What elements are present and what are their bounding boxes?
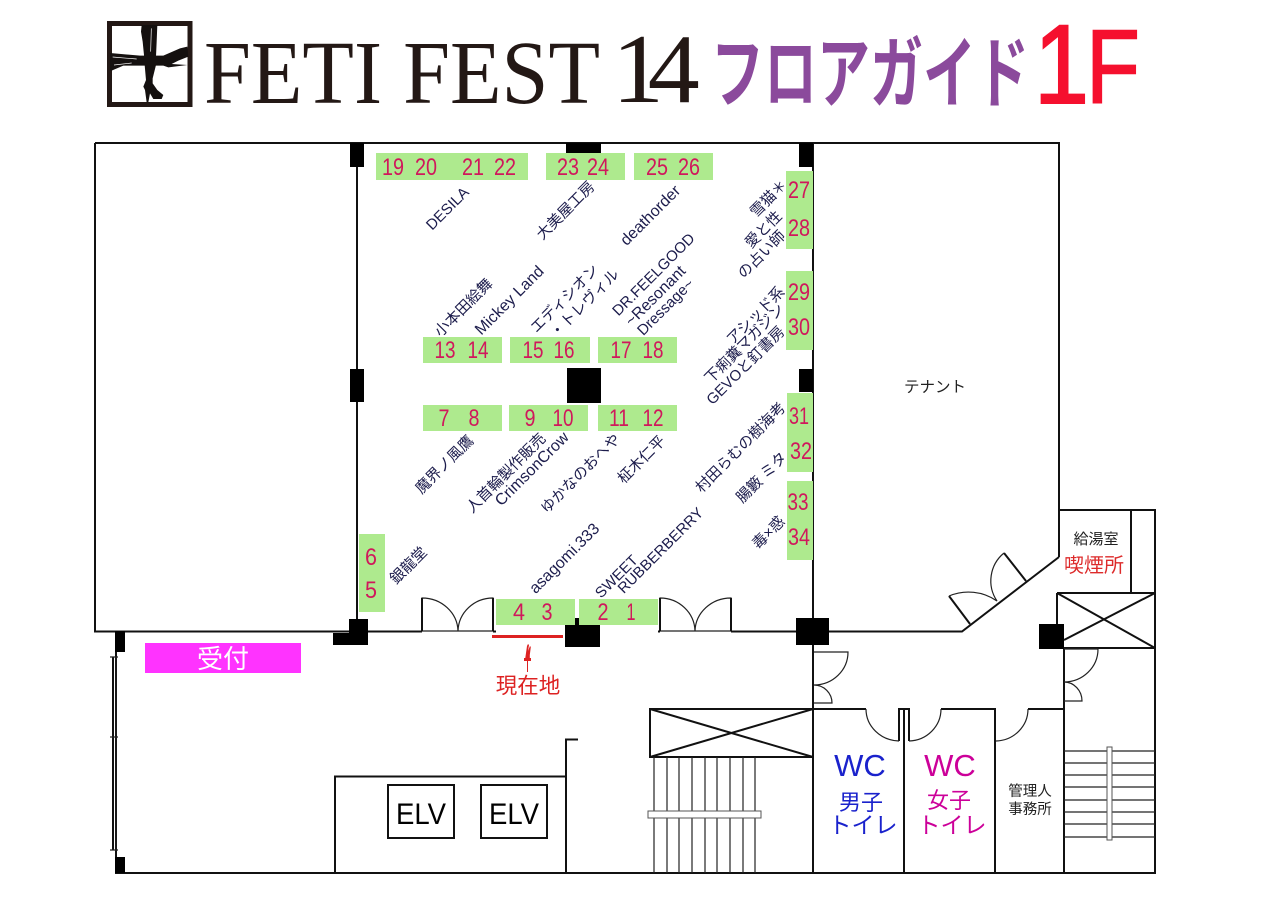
manager office label [1008,782,1052,818]
label: RUBBERBERRY: RUBBERBERRY [615,505,707,597]
women's toilet label [918,748,986,838]
women's toilet label: WC [924,748,976,783]
logo icon: crossed legs in a frame [110,24,190,104]
label: 小本田絵舞: 小本田絵舞 [431,275,496,340]
booths 29-30: 30 [788,314,810,341]
label: DESILA: DESILA [423,184,473,234]
booths 29-30: 29 [788,279,810,306]
label: ゆかなのおへや: ゆかなのおへや [538,431,624,517]
booths 5-6 [359,534,385,612]
booths 19-22 [376,153,528,181]
booths 5-6: 6 [365,544,377,571]
booths 17-18 [598,337,677,364]
booths 33-34 [787,481,813,560]
right staircase [1064,747,1155,840]
label: の占い師: の占い師 [735,228,789,282]
floor plan walls [95,143,1155,873]
booths 9-10: 10 [552,405,574,432]
booths 11-12 [598,405,677,432]
floor number [1034,2,1140,127]
smoking area label: 喫煙所 [1064,554,1124,577]
booths 31-32 [787,393,813,472]
women's toilet label: 女子 [927,788,971,813]
label: 大美屋工房: 大美屋工房 [533,178,598,243]
booths 31-32: 31 [789,403,809,430]
centre staircase [648,757,761,873]
elevator 2: ELV [489,798,539,831]
label: Mickey Land: Mickey Land [472,263,548,339]
label: 下痢糞マガジン: 下痢糞マガジン [702,301,788,387]
floor guide heading: フロアガイド [711,12,1029,124]
reception [145,643,301,674]
booths 15-16 [510,337,590,364]
women's toilet label: トイレ [918,812,986,838]
booths 11-12: 11 [609,405,629,432]
label: 柾木仁平: 柾木仁平 [615,433,669,487]
event number: 14 [612,14,700,123]
event name: FETI FEST [204,24,600,123]
booths 33-34: 34 [788,524,810,551]
label: SWEET: SWEET [592,552,642,602]
elevator 2 [481,785,547,838]
booths 1-2: 2 [598,599,608,626]
men's toilet label [828,748,898,838]
booths 17-18: 18 [642,337,664,364]
you are here marker: 現在地 [496,674,560,698]
label: 腸籔 ミタ: 腸籔 ミタ [733,449,791,507]
booths 5-6: 5 [365,577,377,604]
booths 27-28: 27 [788,177,810,204]
label: Dressage~: Dressage~ [634,275,698,339]
booths 17-18: 17 [610,337,632,364]
booths 25-26 [634,153,713,181]
you are here marker [492,635,563,698]
label: asagomi.333: asagomi.333 [526,520,603,597]
void with cross, centre stairwell [650,709,813,757]
exhibitor names, rotated [387,177,791,602]
label: 銀龍堂: 銀龍堂 [387,544,431,588]
label: 魔界ノ風鷹: 魔界ノ風鷹 [412,432,477,497]
title banner [110,2,1140,127]
label: CrimsonCrow: CrimsonCrow [492,429,573,510]
manager office label: 事務所 [1008,801,1052,818]
booths 23-24: 23 [557,154,579,181]
booths 25-26: 26 [678,154,700,181]
label: 毒×惑: 毒×惑 [749,513,789,553]
booths 19-22: 19 [382,154,404,181]
manager office label: 管理人 [1008,782,1052,800]
label: 村田らむの樹海考: 村田らむの樹海考 [692,399,789,496]
men's toilet label: 男子 [839,790,883,815]
booths 19-22: 22 [494,154,516,181]
booths 19-22: 20 [415,154,437,181]
men's toilet label: WC [834,748,886,783]
booths 15-16: 16 [554,337,574,364]
booths 27-28: 28 [788,215,810,242]
booths 1-2 [579,599,658,626]
label: DR.FEELGOOD: DR.FEELGOOD [609,230,699,319]
floor number: 1 [1034,2,1089,127]
booths 9-10: 9 [524,405,536,432]
label: 雪猫＊: 雪猫＊ [747,177,791,221]
booths 23-24: 24 [587,154,609,181]
booths 33-34: 33 [788,489,808,516]
label: エディシオン: エディシオン [527,261,602,336]
booths 3-4: 4 [513,599,525,626]
booths 13-14: 13 [434,337,456,364]
booths 31-32: 32 [790,438,812,465]
label: 愛と性: 愛と性 [742,208,786,252]
booths 3-4: 3 [542,599,552,626]
label: deathorder: deathorder [617,182,685,249]
label: アシッド系: アシッド系 [724,284,788,348]
booths 7-8 [423,405,502,432]
booths 7-8: 7 [438,405,450,432]
booths 23-24 [546,153,625,181]
booths 9-10 [509,405,588,432]
label: ~Resonant: ~Resonant [622,262,690,330]
booths 27-28 [786,171,813,249]
booths 13-14 [423,337,502,364]
men's toilet label: トイレ [828,812,898,838]
label: GEVOと釘書房: GEVOと釘書房 [703,323,788,408]
booths 15-16: 15 [522,337,544,364]
doors [422,553,1098,741]
booths 13-14: 14 [468,337,488,364]
tenant label: テナント [904,379,966,396]
booths 3-4 [496,599,575,626]
booths 7-8: 8 [468,405,480,432]
label: ・トレヴィル: ・トレヴィル [547,266,623,342]
booths 29-30 [786,271,813,350]
booths 11-12: 12 [642,405,664,432]
booths 25-26: 25 [646,154,668,181]
void with cross, right stairwell [1057,593,1155,648]
elevator 1 [388,785,454,838]
reception: 受付 [197,644,249,674]
label: 人首輪製作販売: 人首輪製作販売 [463,430,549,516]
structural columns [115,143,1064,873]
elevator 1: ELV [396,798,446,831]
floor number: F [1086,9,1140,126]
booths 1-2: 1 [626,599,636,626]
booths 19-22: 21 [462,154,484,181]
kitchenette label: 給湯室 [1073,531,1119,548]
